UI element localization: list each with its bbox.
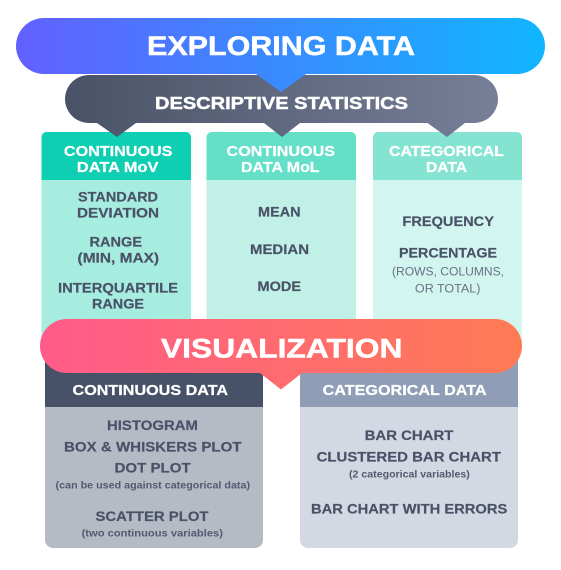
panel: categorical data visualization: CLUSTERED BAR CHART	[317, 450, 502, 465]
panel: categorical data visualization: BAR CHART	[365, 428, 454, 443]
panel: continuous data visualization: (can be used against categorical data)	[56, 480, 250, 491]
panel: categorical data visualization	[300, 360, 518, 548]
panel: categorical data: PERCENTAGE	[399, 245, 497, 260]
panel: continuous data MoL: MEDIAN	[250, 242, 309, 257]
panel: continuous data MoL	[206, 132, 356, 345]
panel: categorical data visualization: BAR CHART WITH ERRORS	[311, 502, 507, 517]
panel: continuous data MoL: MODE	[258, 279, 301, 294]
banner: descriptive statistics: DESCRIPTIVE STATISTICS	[155, 93, 408, 113]
panel: continuous data MoV: INTERQUARTILE	[58, 281, 178, 296]
panel: continuous data MoL: MEAN	[258, 205, 301, 220]
panel: continuous data visualization: SCATTER PLOT	[96, 509, 209, 524]
panel: categorical data: FREQUENCY	[402, 214, 494, 229]
panel: continuous data visualization: DOT PLOT	[114, 460, 192, 475]
banner: descriptive statistics	[65, 75, 498, 137]
panel: continuous data MoV: DEVIATION	[77, 206, 159, 221]
banner: exploring data	[16, 18, 545, 92]
panel: categorical data: CATEGORICAL	[389, 144, 504, 160]
banner: exploring data: EXPLORING DATA	[147, 31, 415, 61]
panel: continuous data MoV	[42, 132, 191, 345]
panel: continuous data visualization: (two continuous variables)	[82, 529, 223, 540]
panel: categorical data visualization: (2 categorical variables)	[349, 469, 470, 480]
panel: continuous data MoV: RANGE	[92, 297, 144, 312]
panel: continuous data MoL: DATA MoL	[241, 160, 320, 176]
panel: continuous data MoV: DATA MoV	[77, 160, 159, 176]
banner: visualization	[40, 319, 522, 390]
panel: categorical data: DATA	[426, 160, 468, 176]
panel: categorical data visualization: CATEGORICAL DATA	[323, 383, 487, 399]
panel: continuous data visualization	[45, 360, 263, 548]
panel: categorical data	[373, 132, 522, 345]
panel: continuous data MoL: CONTINUOUS	[227, 144, 335, 160]
panel: categorical data: (ROWS, COLUMNS,	[392, 266, 504, 278]
banner: visualization: VISUALIZATION	[161, 334, 402, 364]
panel: continuous data MoV: STANDARD	[78, 189, 158, 204]
panel: continuous data MoV: (MIN, MAX)	[78, 251, 159, 266]
panel: continuous data MoV: RANGE	[90, 235, 142, 250]
panel: categorical data: OR TOTAL)	[415, 283, 481, 295]
panel: continuous data visualization: HISTOGRAM	[107, 418, 198, 433]
panel: continuous data MoV: CONTINUOUS	[64, 144, 173, 160]
panel: continuous data visualization: CONTINUOUS DATA	[73, 383, 229, 399]
panel: continuous data visualization: BOX & WHISKERS PLOT	[64, 439, 242, 454]
